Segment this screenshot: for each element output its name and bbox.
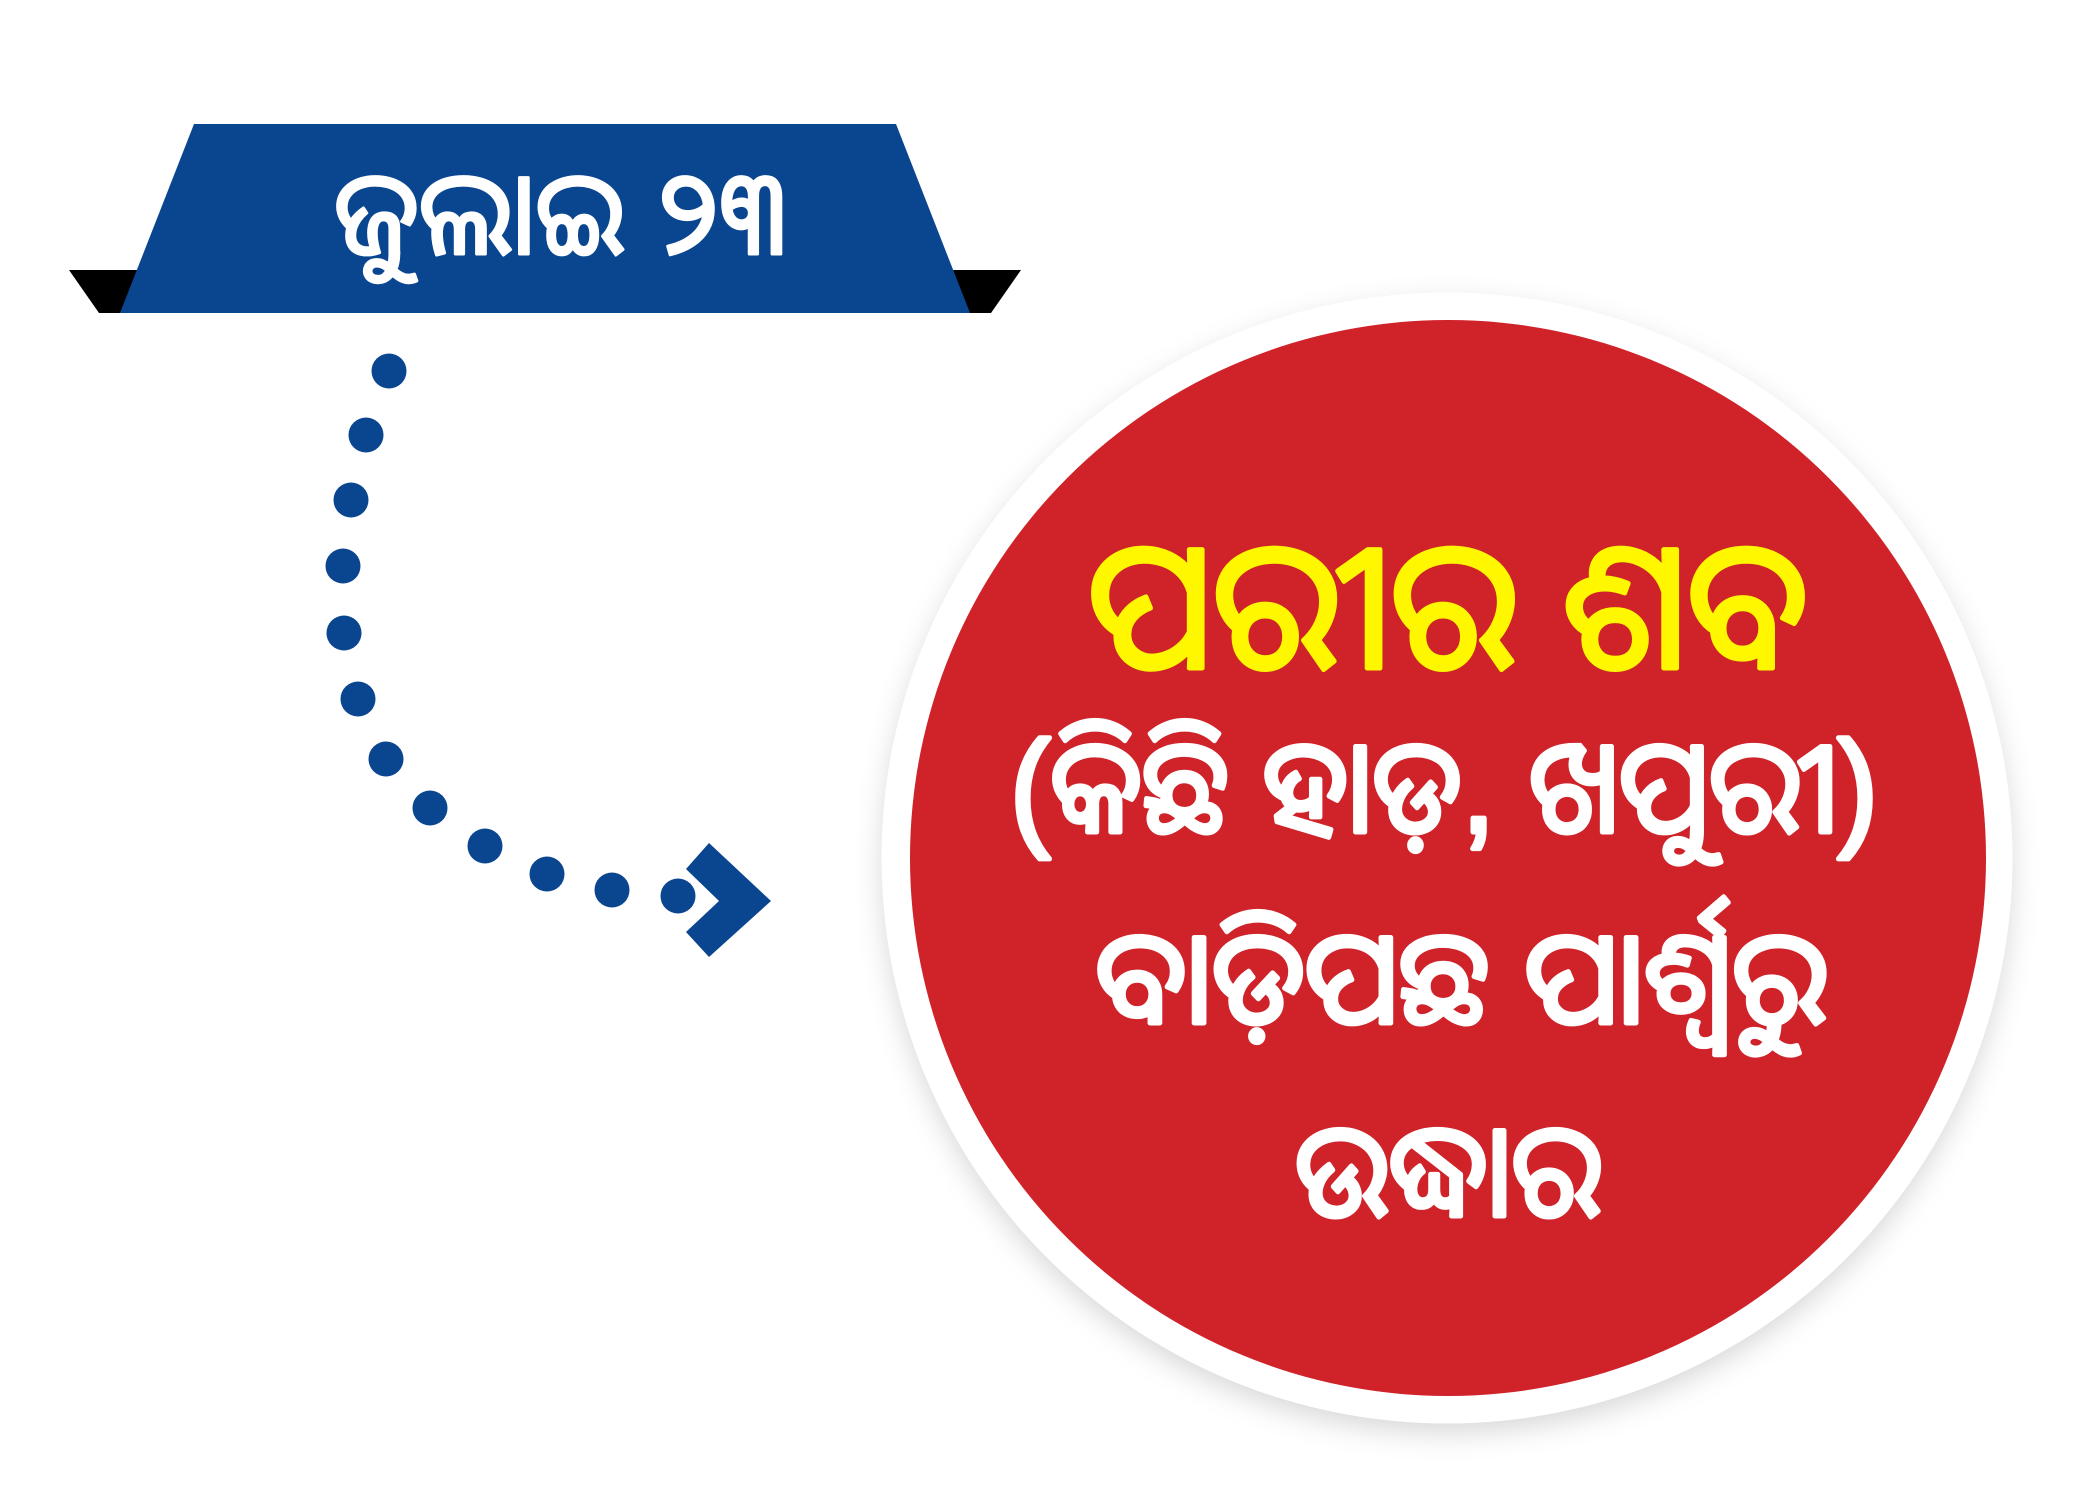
headline: line three: ବାଡ଼ିପଛ ପାର୍ଶ୍ୱରୁ (1096, 896, 1826, 1056)
banner body (120, 124, 970, 313)
headline: line four: ଉଦ୍ଧାର (1295, 1098, 1601, 1244)
headline: line two: (କିଛି ହାଡ଼, ଖପୁରୀ) (1010, 714, 1878, 865)
date banner (69, 124, 1021, 313)
circle shadow (883, 304, 2011, 1432)
red disc (910, 320, 1986, 1396)
dotted curved arrow (326, 354, 771, 957)
headline circle (882, 292, 2012, 1432)
banner date text: ଜୁଲାଇ ୨୩ (334, 149, 784, 283)
banner fold: left (69, 270, 140, 313)
headline: yellow line: ପରୀର ଶବ (1088, 506, 1808, 707)
white ring (882, 292, 2012, 1424)
banner fold: right (950, 270, 1021, 313)
